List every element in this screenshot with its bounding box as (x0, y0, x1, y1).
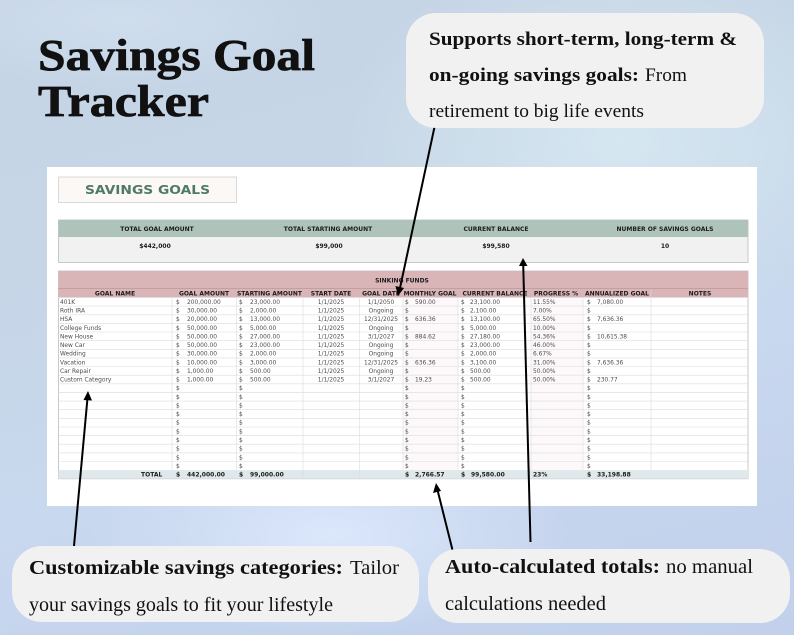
callout: short-term and long-term goals: Supports short-term, long-term & (429, 29, 737, 50)
row: 401K: 200,000.00 (187, 300, 221, 306)
row: Custom Category: 3/1/2027 (368, 378, 394, 384)
summary: total starting amount: $99,000 (315, 243, 343, 250)
row: New House: 27,000.00 (250, 334, 280, 340)
row: Roth IRA: $ (405, 308, 409, 314)
empty rows: $ (239, 455, 243, 461)
total row: 23% (533, 472, 547, 478)
row: Wedding: $ (239, 352, 243, 358)
row: Roth IRA: 7.00% (533, 308, 552, 314)
row: Custom Category: $ (176, 378, 180, 384)
callout: auto-calculated totals: Auto-calculated totals: (445, 556, 660, 578)
empty rows: $ (461, 386, 465, 392)
empty rows: $ (239, 404, 243, 410)
callout: customizable categories: Tailor (350, 557, 399, 579)
row: Car Repair: $ (587, 369, 591, 375)
row: 401K: 1/1/2050 (368, 300, 394, 306)
row: Vacation: 1/1/2025 (318, 360, 344, 366)
callout: customizable categories: Customizable savings categories: (29, 557, 343, 579)
row: Vacation: $ (405, 360, 409, 366)
title: Savings Goal (38, 31, 315, 80)
empty rows: $ (587, 429, 591, 435)
summary: total goal amount: TOTAL GOAL AMOUNT (120, 226, 195, 233)
row: Wedding: 2,000.00 (470, 352, 496, 358)
row: Wedding: Wedding (60, 352, 86, 358)
summary: total goal amount: $442,000 (139, 243, 171, 250)
total row: $ (587, 472, 591, 478)
row: New Car: $ (587, 343, 591, 349)
empty rows: $ (461, 455, 465, 461)
row: HSA (60, 317, 623, 323)
row: 401K: 1/1/2025 (318, 300, 344, 306)
row: Vacation: 636.36 (415, 360, 436, 366)
arrow: to current balance (519, 258, 530, 542)
callout: customizable categories: your savings goals to fit your lifestyle (29, 594, 333, 616)
total row: $ (239, 472, 243, 478)
title (38, 31, 315, 126)
empty rows: $ (176, 395, 180, 401)
empty rows: $ (587, 438, 591, 444)
callout: auto-calculated totals (428, 549, 790, 623)
total row: TOTAL (141, 472, 162, 478)
table header row: CURRENT BALANCE (462, 290, 528, 298)
row: Car Repair: Ongoing (369, 369, 394, 375)
total row (141, 472, 631, 478)
row: 401K (60, 300, 623, 306)
row: New House (60, 334, 627, 340)
row: Car Repair: 500.00 (470, 369, 491, 375)
empty rows: $ (405, 464, 409, 470)
row: Custom Category (60, 378, 618, 384)
empty rows: $ (461, 404, 465, 410)
row: HSA: 65.50% (533, 317, 556, 323)
row: 401K: 23,000.00 (250, 300, 280, 306)
summary: current balance (463, 226, 529, 250)
row: Vacation (60, 360, 623, 366)
row: College Funds: $ (461, 326, 465, 332)
empty rows (176, 386, 591, 470)
empty rows: $ (587, 412, 591, 418)
row: Custom Category: Custom Category (60, 378, 112, 384)
row: Custom Category: 1/1/2025 (318, 378, 344, 384)
row: College Funds: College Funds (60, 326, 101, 332)
empty rows: $ (461, 438, 465, 444)
table header row: ANNUALIZED GOAL (585, 290, 649, 298)
empty rows: $ (405, 395, 409, 401)
summary: total starting amount: TOTAL STARTING AMOUNT (284, 226, 373, 233)
total row: 99,580.00 (471, 472, 505, 478)
empty rows: $ (405, 455, 409, 461)
row: New House: 27,180.00 (470, 334, 500, 340)
row: College Funds: 10.00% (533, 326, 556, 332)
row: Car Repair: $ (239, 369, 243, 375)
table header row: GOAL NAME (95, 290, 135, 298)
row: Car Repair: 500.00 (250, 369, 271, 375)
row: New House: 10,615.38 (597, 334, 627, 340)
row: Vacation: 12/31/2025 (364, 360, 398, 366)
callout: auto-calculated totals: no manual (666, 556, 753, 578)
row: Vacation: $ (176, 360, 180, 366)
empty rows: $ (461, 395, 465, 401)
row: Wedding: $ (587, 352, 591, 358)
row: HSA: $ (176, 317, 180, 323)
summary: total starting amount (284, 226, 373, 250)
row: New Car: Ongoing (369, 343, 394, 349)
table header row: NOTES (689, 290, 711, 298)
empty rows: $ (587, 421, 591, 427)
table header row: START DATE (311, 290, 351, 298)
sheet heading: savings goals (58, 177, 236, 202)
row: 401K: 590.00 (415, 300, 436, 306)
row: College Funds: 50,000.00 (187, 326, 217, 332)
table header row: GOAL AMOUNT (179, 290, 230, 298)
row: New House: $ (239, 334, 243, 340)
row: Roth IRA: 2,000.00 (250, 308, 276, 314)
row: Car Repair: Car Repair (60, 369, 91, 375)
row: Custom Category: 50.00% (533, 378, 556, 384)
row: Car Repair (60, 369, 591, 375)
row: Roth IRA: Roth IRA (60, 308, 85, 314)
callout: short-term and long-term goals: From (645, 65, 687, 86)
row: New House: 1/1/2025 (318, 334, 344, 340)
empty rows: $ (176, 412, 180, 418)
row: New Car: 1/1/2025 (318, 343, 344, 349)
row: Custom Category: $ (239, 378, 243, 384)
row: 401K: 11.55% (533, 300, 556, 306)
row: Custom Category: 230.77 (597, 378, 618, 384)
row: New House: New House (60, 334, 94, 340)
summary band (58, 220, 748, 262)
empty rows: $ (176, 447, 180, 453)
row: HSA: 20,000.00 (187, 317, 217, 323)
row: 401K: $ (461, 300, 465, 306)
summary: number of savings goals (617, 226, 713, 250)
row: HSA: $ (587, 317, 591, 323)
row: Roth IRA: Ongoing (369, 308, 394, 314)
empty rows: $ (239, 395, 243, 401)
row: New Car: New Car (60, 343, 85, 349)
row: Roth IRA (60, 308, 591, 314)
row: Custom Category: $ (461, 378, 465, 384)
row: New House: $ (587, 334, 591, 340)
row: Vacation: 3,000.00 (250, 360, 276, 366)
row: Roth IRA: $ (461, 308, 465, 314)
total row: 99,000.00 (250, 472, 284, 478)
total row: 2,766.57 (415, 472, 445, 478)
empty rows: $ (176, 464, 180, 470)
empty rows: $ (587, 395, 591, 401)
sheet heading: savings goals: SAVINGS GOALS (85, 182, 210, 197)
row: Vacation: $ (587, 360, 591, 366)
empty rows: $ (239, 386, 243, 392)
row: New House: 884.62 (415, 334, 436, 340)
total row: $ (461, 472, 465, 478)
empty rows: $ (176, 421, 180, 427)
row: Wedding: $ (405, 352, 409, 358)
row: College Funds: 5,000.00 (250, 326, 276, 332)
row: New Car: 23,000.00 (250, 343, 280, 349)
row: Roth IRA: 2,100.00 (470, 308, 496, 314)
row: Wedding: 30,000.00 (187, 352, 217, 358)
row: HSA: 7,636.36 (597, 317, 623, 323)
empty rows: $ (176, 429, 180, 435)
total row: $ (176, 472, 180, 478)
empty rows: $ (461, 447, 465, 453)
row: Custom Category: 500.00 (470, 378, 491, 384)
row: Car Repair: $ (461, 369, 465, 375)
empty rows: $ (239, 421, 243, 427)
callout: short-term and long-term goals (406, 13, 764, 128)
empty rows: $ (405, 429, 409, 435)
row: Car Repair: $ (176, 369, 180, 375)
row: 401K: 401K (60, 300, 75, 306)
row: Vacation: $ (461, 360, 465, 366)
summary: total goal amount (120, 226, 195, 250)
row: 401K: $ (405, 300, 409, 306)
row: Custom Category: 1,000.00 (187, 378, 213, 384)
table header row: MONTHLY GOAL (404, 290, 457, 298)
empty rows: $ (405, 447, 409, 453)
row: College Funds: 5,000.00 (470, 326, 496, 332)
row: Car Repair: 1,000.00 (187, 369, 213, 375)
row: 401K: 23,100.00 (470, 300, 500, 306)
row: 401K: $ (587, 300, 591, 306)
table header row: PROGRESS % (534, 290, 578, 298)
row: Roth IRA: $ (239, 308, 243, 314)
empty rows: $ (587, 404, 591, 410)
callout: short-term and long-term goals: retirement to big life events (429, 101, 644, 122)
row: New House: 50,000.00 (187, 334, 217, 340)
summary: current balance: $99,580 (482, 243, 510, 250)
empty rows: $ (239, 429, 243, 435)
row: New Car: 46.00% (533, 343, 556, 349)
row: New House: 3/1/2027 (368, 334, 394, 340)
row: Roth IRA: $ (587, 308, 591, 314)
empty rows: $ (405, 438, 409, 444)
row: HSA: 1/1/2025 (318, 317, 344, 323)
row: Wedding: $ (176, 352, 180, 358)
empty rows: $ (176, 438, 180, 444)
row: Roth IRA: $ (176, 308, 180, 314)
summary: current balance: CURRENT BALANCE (463, 226, 529, 233)
empty rows: $ (176, 386, 180, 392)
empty rows: $ (587, 447, 591, 453)
empty rows: $ (405, 421, 409, 427)
row: HSA: HSA (60, 317, 72, 323)
table header row: STARTING AMOUNT (237, 290, 303, 298)
empty rows: $ (461, 412, 465, 418)
total row: 442,000.00 (187, 472, 225, 478)
empty rows: $ (239, 412, 243, 418)
row: HSA: $ (239, 317, 243, 323)
row: Vacation: Vacation (60, 360, 86, 366)
empty rows: $ (587, 464, 591, 470)
empty rows: $ (587, 455, 591, 461)
empty rows: $ (461, 421, 465, 427)
row: Custom Category: 500.00 (250, 378, 271, 384)
empty rows: $ (239, 447, 243, 453)
row: HSA: $ (461, 317, 465, 323)
callout: auto-calculated totals: calculations needed (445, 593, 606, 615)
row: Vacation: 3,100.00 (470, 360, 496, 366)
total row: 33,198.88 (597, 472, 631, 478)
row: New House: $ (461, 334, 465, 340)
row: Custom Category: $ (587, 378, 591, 384)
arrow: to monthly goal total (433, 483, 452, 550)
row: Vacation: 7,636.36 (597, 360, 623, 366)
total row: $ (405, 472, 409, 478)
table header row (95, 290, 711, 298)
empty rows: $ (405, 404, 409, 410)
row: Car Repair: 1/1/2025 (318, 369, 344, 375)
row: New House: $ (405, 334, 409, 340)
row: College Funds: Ongoing (369, 326, 394, 332)
empty rows: $ (405, 412, 409, 418)
empty rows: $ (176, 455, 180, 461)
arrow: to custom category (74, 391, 92, 546)
arrow: to goal date column (396, 127, 434, 296)
empty rows: $ (461, 429, 465, 435)
row: HSA: 13,100.00 (470, 317, 500, 323)
row: Roth IRA: 1/1/2025 (318, 308, 344, 314)
title: Tracker (38, 77, 209, 126)
row: New Car: $ (176, 343, 180, 349)
empty rows: $ (461, 464, 465, 470)
row: Roth IRA: 30,000.00 (187, 308, 217, 314)
row: Car Repair: $ (405, 369, 409, 375)
row: 401K: $ (176, 300, 180, 306)
row: 401K: $ (239, 300, 243, 306)
summary: number of savings goals: 10 (661, 243, 669, 250)
row: Vacation: 31.00% (533, 360, 556, 366)
row: Vacation: 10,000.00 (187, 360, 217, 366)
empty rows: $ (405, 386, 409, 392)
row: College Funds (60, 326, 591, 332)
row: 401K: 7,080.00 (597, 300, 623, 306)
row: College Funds: $ (587, 326, 591, 332)
panel: spreadsheet (47, 167, 757, 506)
table title: SINKING FUNDS (375, 278, 429, 284)
summary: number of savings goals: NUMBER OF SAVINGS GOALS (617, 226, 713, 233)
row: New Car (60, 343, 591, 349)
row: College Funds: 1/1/2025 (318, 326, 344, 332)
row: Wedding: $ (461, 352, 465, 358)
row: Custom Category: 19.23 (415, 378, 432, 384)
row: Vacation: $ (239, 360, 243, 366)
row: Wedding: 1/1/2025 (318, 352, 344, 358)
row: Wedding: 6.67% (533, 352, 552, 358)
callout: customizable categories (12, 546, 419, 622)
row: New House: $ (176, 334, 180, 340)
row: College Funds: $ (176, 326, 180, 332)
row: HSA: 13,000.00 (250, 317, 280, 323)
row: New Car: $ (239, 343, 243, 349)
row: Wedding: Ongoing (369, 352, 394, 358)
table header row: GOAL DATE (362, 290, 400, 298)
row: HSA: $ (405, 317, 409, 323)
empty rows: $ (239, 438, 243, 444)
row: New Car: 50,000.00 (187, 343, 217, 349)
row: New Car: 23,000.00 (470, 343, 500, 349)
row: College Funds: $ (405, 326, 409, 332)
row: Wedding: 2,000.00 (250, 352, 276, 358)
row: Wedding (60, 352, 591, 358)
empty rows: $ (176, 404, 180, 410)
empty rows: $ (587, 386, 591, 392)
row: New House: 54.36% (533, 334, 556, 340)
row: College Funds: $ (239, 326, 243, 332)
table: sinking funds (58, 271, 748, 479)
row: HSA: 636.36 (415, 317, 436, 323)
row: New Car: $ (405, 343, 409, 349)
row: HSA: 12/31/2025 (364, 317, 398, 323)
row: Custom Category: $ (405, 378, 409, 384)
empty rows: $ (239, 464, 243, 470)
callout: short-term and long-term goals: on-going savings goals: (429, 65, 639, 86)
row: New Car: $ (461, 343, 465, 349)
row: Car Repair: 50.00% (533, 369, 556, 375)
